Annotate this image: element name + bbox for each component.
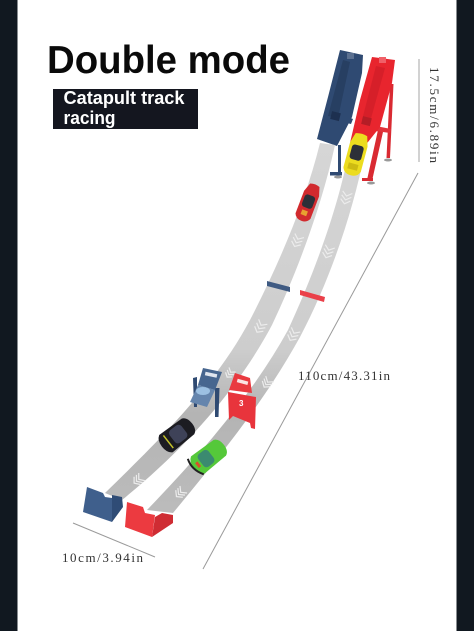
height dimension line [418, 59, 420, 162]
blue launcher ramp [317, 50, 363, 178]
red launcher ramp [350, 57, 395, 184]
length label: 110cm/43.31in [298, 368, 390, 383]
blue track [105, 143, 335, 500]
length dimension line [203, 173, 418, 569]
subtitle box: racing [64, 108, 116, 128]
green car [187, 436, 231, 477]
red car [294, 181, 323, 224]
blue base block [83, 487, 123, 522]
width dimension line [73, 523, 155, 557]
red finish gate: 3 [239, 399, 244, 408]
yellow car [342, 131, 370, 178]
red track clip [300, 290, 325, 302]
blue finish gate [190, 368, 222, 417]
title: Double mode [47, 39, 290, 82]
black car [155, 415, 199, 455]
red track [147, 150, 365, 513]
right side bar [456, 0, 474, 631]
left side bar [0, 0, 18, 631]
red finish gate [228, 373, 256, 429]
red base block [125, 502, 173, 537]
height label: 17.5cm/6.89in [427, 67, 442, 164]
chevrons [131, 191, 352, 500]
width label: 10cm/3.94in [62, 550, 144, 565]
subtitle box [53, 88, 198, 129]
blue track clip [267, 281, 290, 292]
subtitle box: Catapult track [64, 88, 185, 108]
